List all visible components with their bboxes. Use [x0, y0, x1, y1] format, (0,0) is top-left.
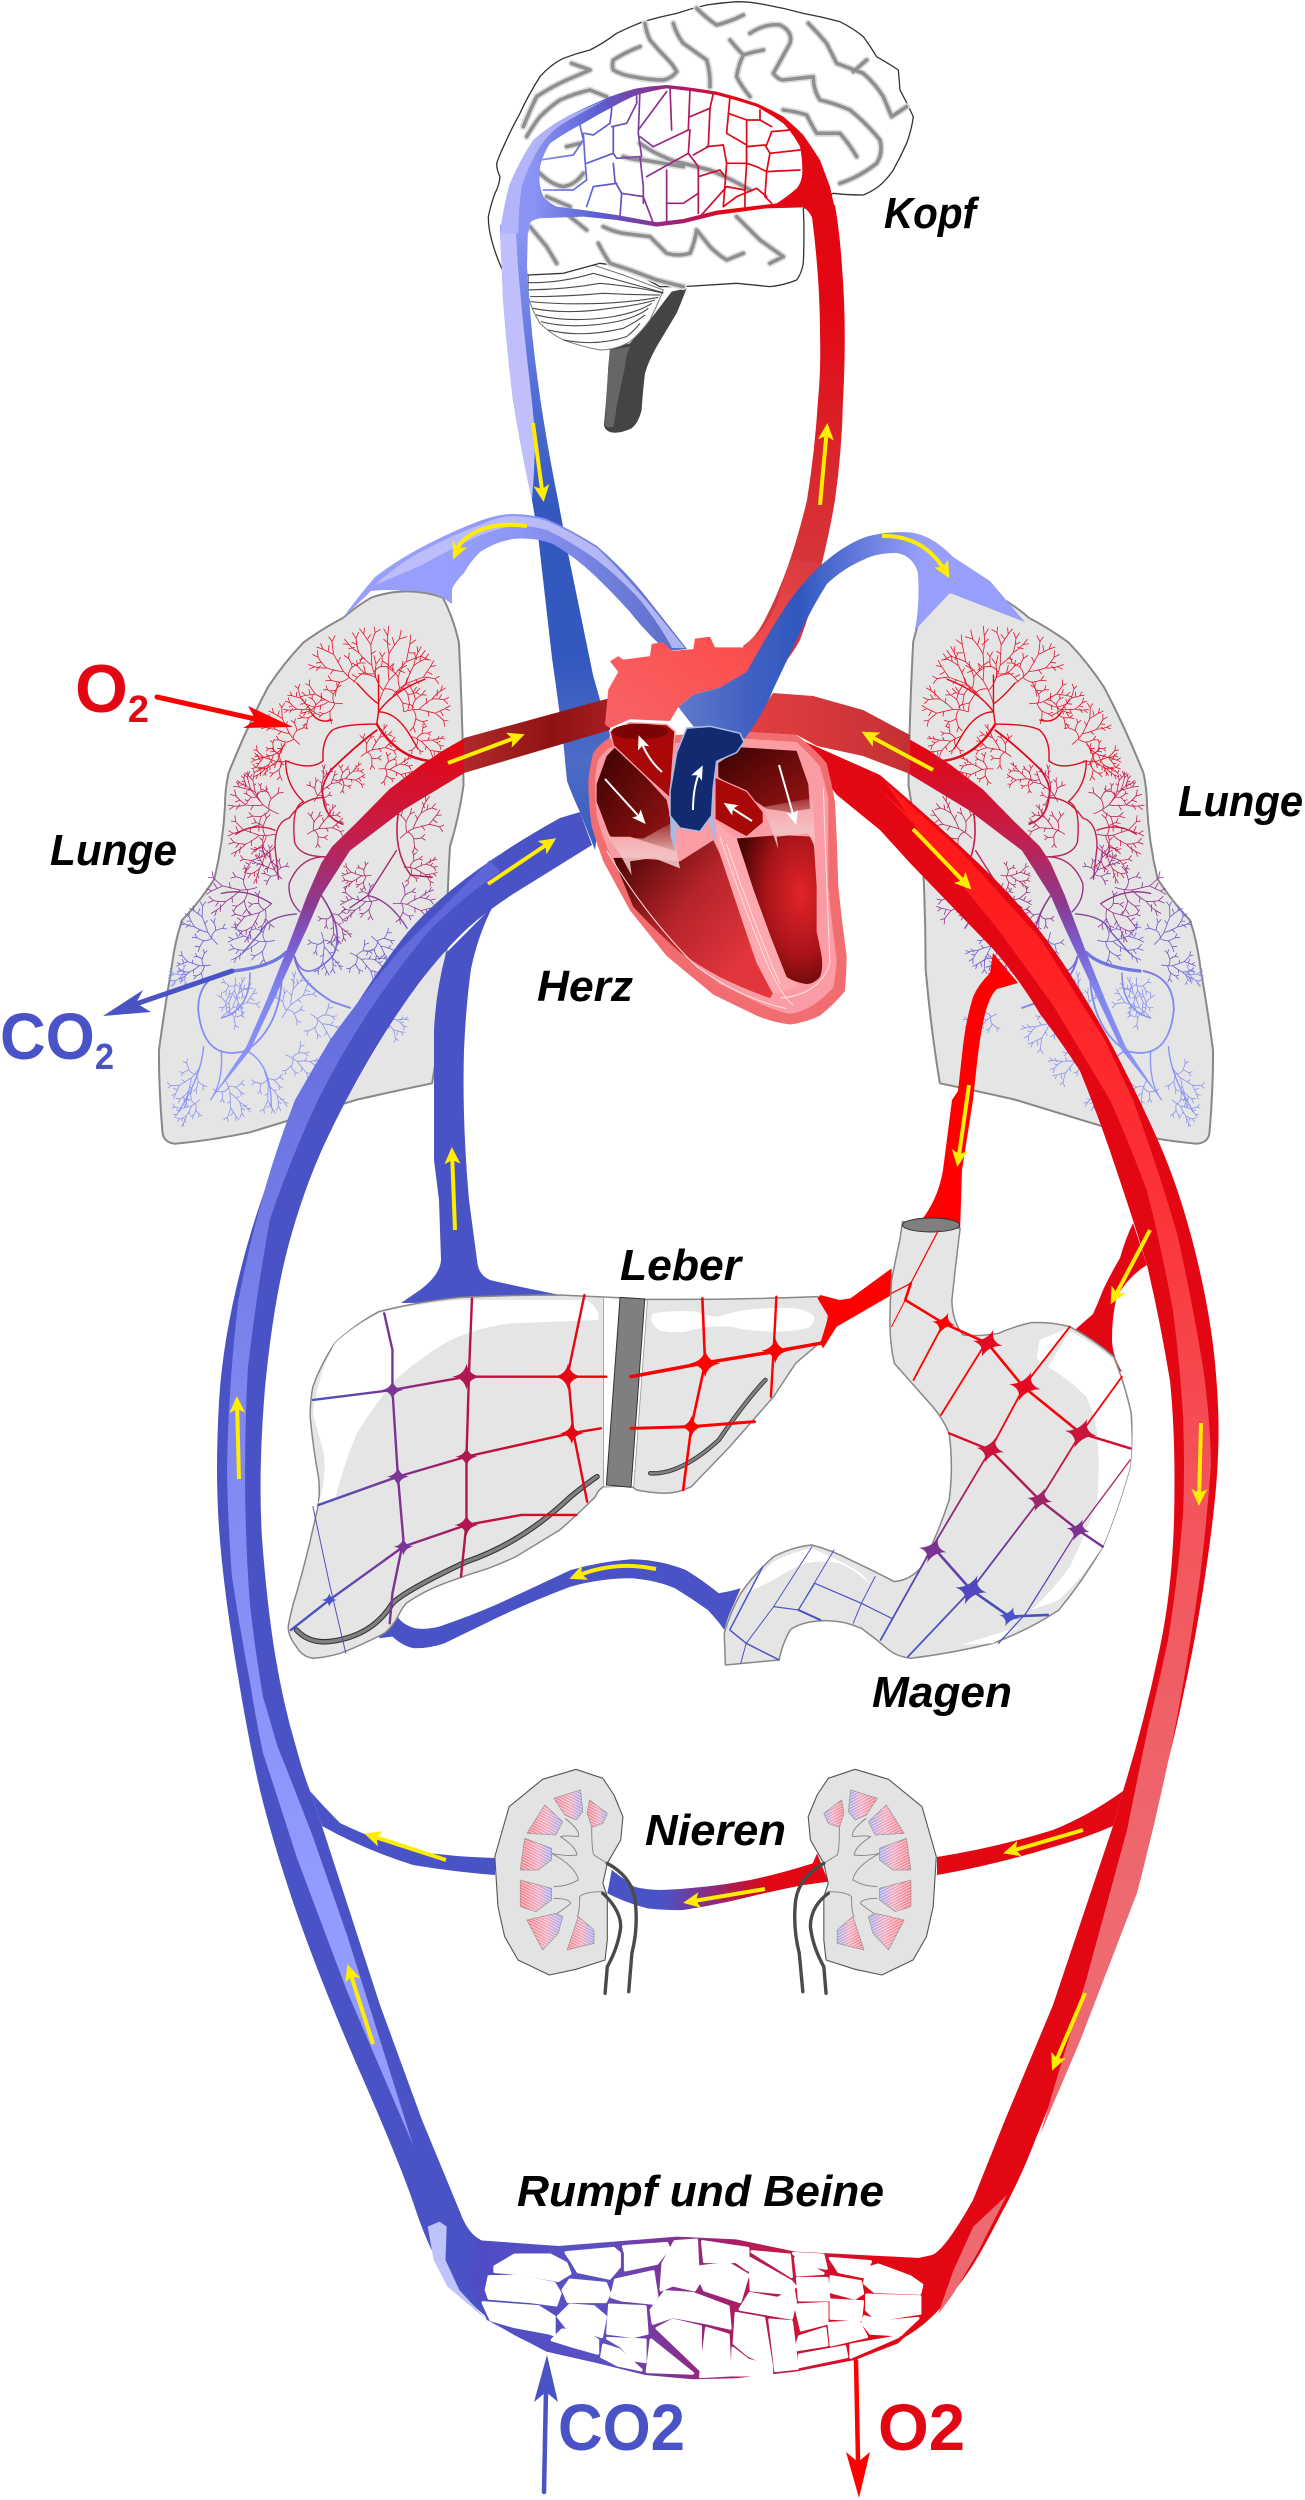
stomach capillaries: [730, 1231, 1130, 1663]
right atrium: [597, 746, 675, 851]
arrow: yellow flow in head artery: [820, 428, 827, 505]
left kidney: [495, 1769, 623, 1975]
label: O2 at lung: 2: [128, 689, 149, 731]
arrow: yellow flow lower left: [349, 1969, 373, 2044]
label: CO2 at body: CO2: [558, 2390, 685, 2464]
vessel: stomach branch artery: [1060, 1223, 1147, 1372]
vein inner highlight: [428, 2222, 487, 2320]
heart outer wall: [588, 732, 847, 1024]
capillaries: [540, 87, 800, 223]
left lung: [159, 591, 464, 1144]
liver capillary nodes: [322, 1338, 790, 1607]
liver highlights: [313, 1300, 815, 1503]
panel: liver and stomach: [288, 1218, 1132, 1665]
arrow: yellow flow renal vein: [369, 1835, 446, 1860]
liver outline: [288, 1295, 829, 1658]
tissue cells: [483, 2240, 922, 2377]
right ventricle: [613, 840, 773, 998]
brain outline: [488, 2, 913, 287]
stomach capillary nodes: [913, 1311, 1103, 1628]
vessel: hepatic vein: [401, 906, 560, 1303]
arrow: yellow flow left side: [237, 1401, 239, 1479]
right kidney: [808, 1769, 936, 1975]
arrow: yellow flow lower right: [1054, 1993, 1085, 2066]
pulmonary trunk interior: [670, 726, 744, 832]
label: Herz: Herz: [537, 962, 633, 1011]
liver artery branch: [818, 1268, 892, 1348]
arrows: heart flow: [605, 739, 795, 821]
arrow: yellow flow renal artery: [1008, 1830, 1083, 1852]
cerebral folds: [523, 8, 907, 287]
label: Kopf: Kopf: [884, 189, 980, 238]
label: CO2 at lung: 2: [95, 1036, 114, 1077]
portal vein: [379, 1559, 741, 1648]
left ventricle: [737, 835, 822, 984]
arrow: yellow flow right side: [1199, 1423, 1201, 1501]
left outflow chamber: [715, 777, 763, 837]
tricuspid valve: [600, 823, 680, 875]
arrow: yellow flow in right pulmonary arch: [882, 536, 947, 574]
vessel: renal artery: [937, 1791, 1123, 1875]
vessel: aorta descending (big artery): [790, 735, 1219, 2360]
label: CO2 at lung: CO: [0, 999, 99, 1073]
arrow: yellow flow from left lung: [448, 736, 520, 763]
arrow: yellow flow upper aorta: [913, 829, 968, 886]
arrow: yellow flow from right lung: [866, 734, 933, 770]
label: Nieren: Nieren: [645, 1806, 786, 1855]
arrow: O2 to body: [846, 2361, 870, 2498]
mitral valve: [763, 798, 815, 849]
arrow: yellow flow in left pulmonary arch: [455, 525, 527, 555]
heart fibres: [607, 788, 830, 1009]
pulmonary trunk and right pulmonary artery: [678, 532, 1025, 739]
vessel: left pulmonary vein arch: [341, 514, 687, 651]
arrow: yellow flow in upper vena cava: [488, 841, 552, 884]
left atrium: [718, 747, 810, 812]
panel: lungs: [159, 591, 1213, 1144]
vessel: renal vein: [310, 1791, 495, 1875]
septum: [715, 821, 800, 995]
renal connecting vessel: [607, 1853, 828, 1910]
capillary bed: [471, 2237, 930, 2379]
bile streaks: [296, 1380, 765, 1642]
vessel: oesophageal artery branch: [920, 953, 1018, 1232]
aorta: [605, 560, 822, 728]
cerebellum: [528, 265, 663, 350]
artery inner highlight: [938, 2195, 1007, 2315]
arrow: CO2 out of lung: [103, 971, 232, 1016]
panel: trunk and legs capillary bed: [428, 2195, 1007, 2379]
capillary ribbon: [500, 85, 837, 233]
heart inner wall: [595, 739, 837, 1014]
label: O2 at lung: O: [75, 651, 128, 727]
vessel: vena cava (big vein): [217, 812, 640, 2363]
panel: brain: [488, 2, 913, 433]
panel: kidneys: [495, 1769, 936, 1993]
brainstem: [604, 288, 687, 433]
label: Rumpf und Beine: Rumpf und Beine: [517, 2167, 884, 2216]
arrow: yellow flow between kidneys: [688, 1889, 765, 1902]
ureters: [603, 1863, 828, 1993]
label: Magen: Magen: [872, 1668, 1012, 1717]
arrow: yellow flow oesophageal branch: [958, 1085, 969, 1162]
oesophagus opening: [903, 1218, 960, 1232]
liver capillaries: [291, 1295, 820, 1653]
vessel: superior vena cava: [500, 225, 610, 850]
arrow: yellow flow in hepatic vein: [452, 1152, 455, 1230]
aortic root: [610, 723, 675, 798]
falciform ligament: [604, 1297, 647, 1487]
vessel: carotid artery to head: [743, 205, 845, 690]
arrow: CO2 from body: [534, 2355, 558, 2492]
arrow: O2 into lung: [157, 697, 293, 728]
aortic root shade: [612, 724, 668, 739]
arrow: yellow flow stomach branch: [1113, 1230, 1150, 1300]
label: Lunge left: Lunge: [50, 826, 177, 875]
stomach highlights: [746, 1328, 1132, 1645]
panel: brain capillaries: [500, 85, 837, 233]
label: Leber: Leber: [620, 1241, 744, 1290]
valve flaps: [670, 812, 716, 851]
label: O2 at body: O2: [878, 2390, 965, 2464]
arrow: yellow flow in head vein: [533, 423, 543, 497]
stomach outline: [724, 1222, 1132, 1665]
right lung: [908, 591, 1213, 1144]
panel: heart: [588, 532, 1025, 1024]
vessel: left pulmonary connection to heart: [464, 698, 610, 773]
arrow: yellow flow portal vein: [574, 1566, 656, 1577]
light edge of ribbon: [500, 99, 607, 233]
vessel: right pulmonary connection to heart: [747, 693, 910, 774]
